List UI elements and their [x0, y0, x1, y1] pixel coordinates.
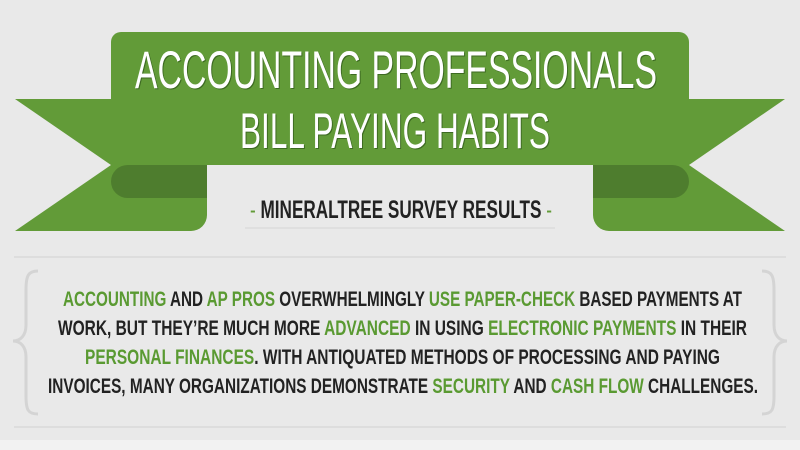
- title: BILL PAYING HABITS: [241, 104, 551, 160]
- subtitle: - MINERALTREE SURVEY RESULTS -: [250, 196, 552, 224]
- ribbon banner: [15, 32, 785, 231]
- title: [135, 41, 658, 160]
- footer strip: [0, 440, 800, 450]
- main banner: [111, 32, 689, 165]
- right brace: [762, 271, 787, 414]
- summary text: INVOICES, MANY ORGANIZATIONS DEMONSTRATE SECURITY AND CASH FLOW CHALLENGES.: [48, 375, 758, 398]
- summary text: WORK, BUT THEY’RE MUCH MORE ADVANCED IN USING ELECTRONIC PAYMENTS IN THEIR: [58, 317, 747, 340]
- right fold: [593, 165, 689, 198]
- summary text: [48, 288, 758, 398]
- left brace: [13, 271, 38, 414]
- left fold: [111, 165, 207, 198]
- summary text: ACCOUNTING AND AP PROS OVERWHELMINGLY USE PAPER-CHECK BASED PAYMENTS AT: [63, 288, 742, 311]
- left ribbon tail: [15, 99, 207, 231]
- right ribbon tail: [593, 99, 785, 231]
- title: BILL PAYING HABITS: [240, 103, 550, 159]
